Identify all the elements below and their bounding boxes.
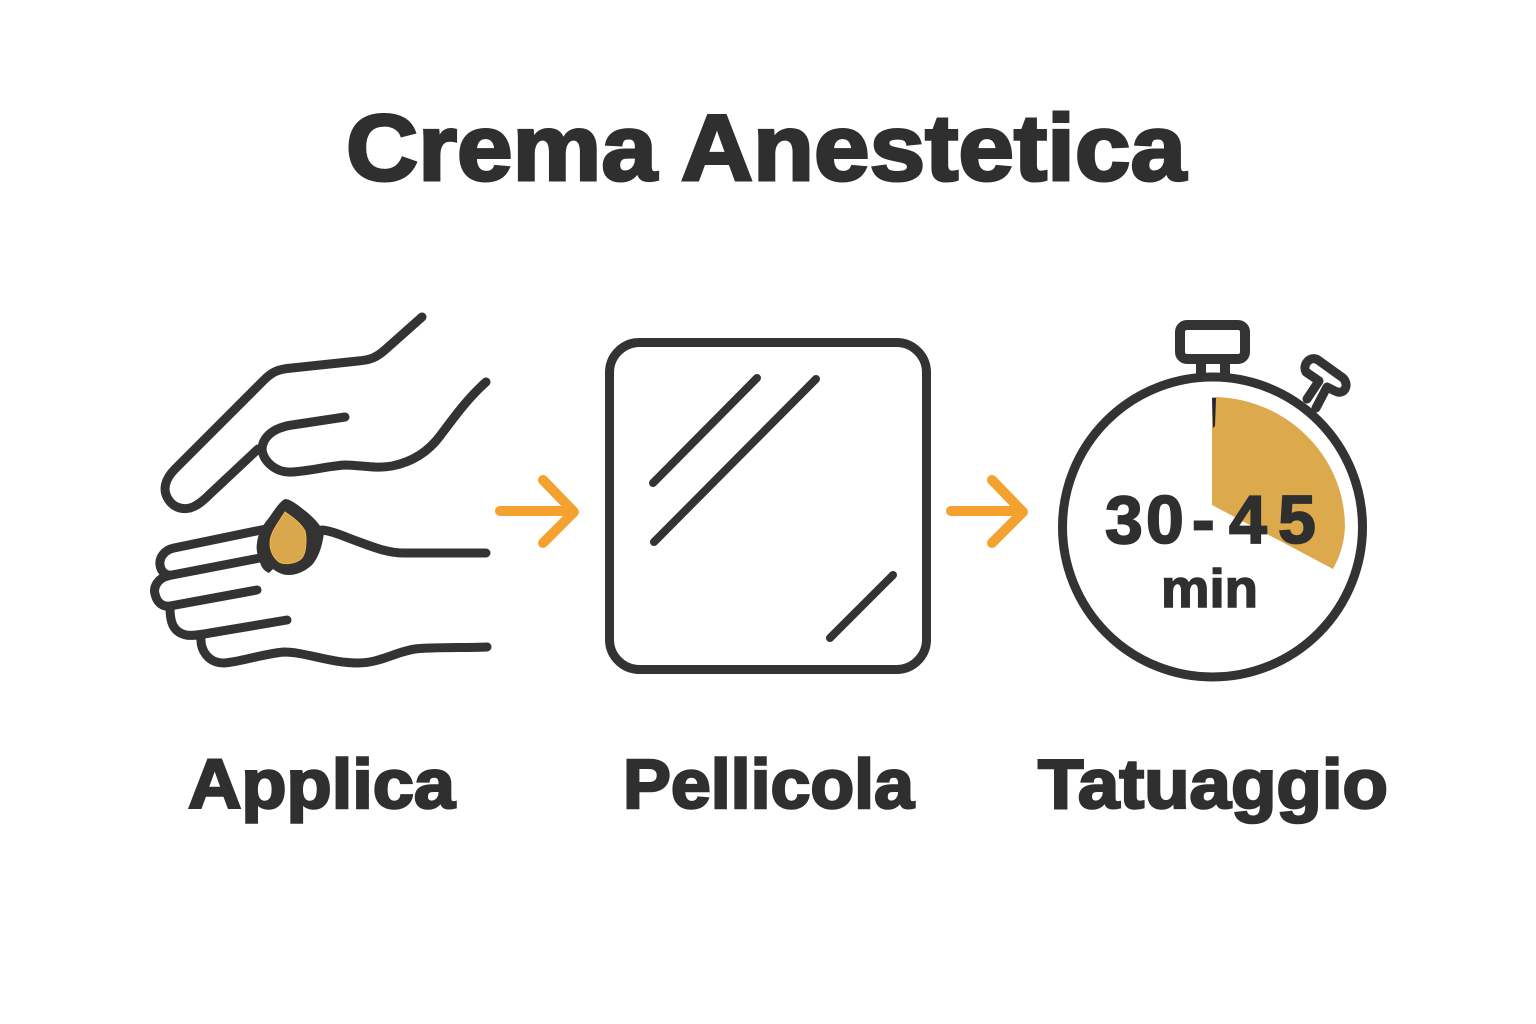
upper hand	[165, 317, 486, 509]
arrow: applica to pellicola	[500, 480, 574, 543]
title: Crema Anestetica	[346, 95, 1187, 200]
label: applica: Applica	[188, 745, 456, 823]
lower hand	[155, 529, 487, 663]
stopwatch side button	[1305, 359, 1346, 408]
elapsed time wedge	[1212, 397, 1345, 569]
label: tatuaggio: Tatuaggio	[1038, 745, 1388, 823]
unit text: min	[1161, 559, 1258, 619]
arrow: pellicola to tatuaggio	[951, 480, 1023, 543]
icon: hands applying cream	[155, 317, 487, 663]
icon: film sheet	[610, 342, 926, 670]
icon: cream drop	[257, 499, 324, 575]
time text: 30-45	[1105, 482, 1316, 558]
stopwatch crown	[1180, 325, 1245, 374]
tick mark	[1212, 398, 1216, 428]
icon: stopwatch	[1062, 325, 1362, 677]
label: pellicola: Pellicola	[623, 745, 915, 823]
stopwatch dial	[1062, 377, 1362, 677]
